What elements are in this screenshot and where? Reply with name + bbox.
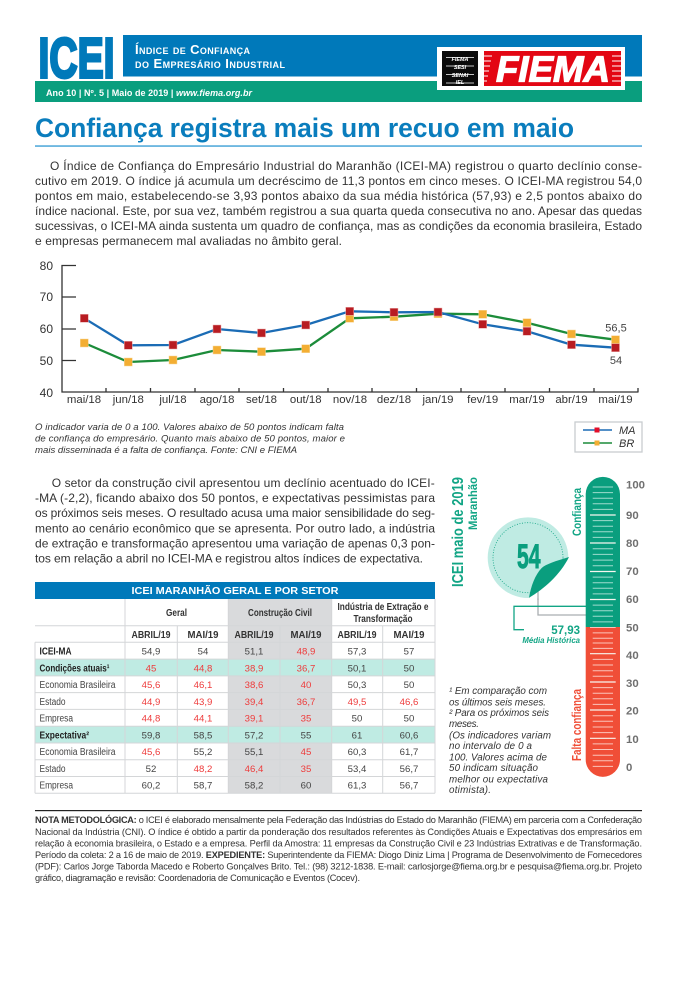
chart axes: jul/18	[158, 394, 187, 406]
row: Economia Brasileira expectativa: Economia Brasileira	[40, 747, 116, 758]
row: ICEI-MA: ICEI-MA	[40, 646, 72, 658]
FIEMA logo: IEL	[456, 80, 464, 86]
legend: MA	[619, 425, 636, 437]
thermometer scale: 60	[626, 594, 639, 606]
thermometer scale: 70	[626, 566, 639, 578]
row: Empresa: 50	[404, 714, 414, 725]
row: Empresa: 44,8	[142, 714, 160, 725]
legend	[575, 422, 642, 452]
row: Expectativa: 59,8	[142, 730, 160, 741]
footnotes: meses.	[449, 719, 479, 730]
row: Estado expectativa: 53,4	[348, 764, 367, 775]
footnotes: 50 indicam situação	[449, 763, 539, 774]
value label MA: 54	[610, 355, 622, 367]
table title bar: ICEI MARANHÃO GERAL E POR SETOR	[132, 584, 339, 597]
intro paragraph: cutivo em 2019. O índice já acumula um decréscimo de 11,3 pontos em cinco meses. O ICEI-MA registrou 54,0	[35, 174, 642, 188]
row: Economia Brasileira: 38,6	[245, 680, 263, 691]
row: Condições atuais: 38,9	[245, 663, 263, 674]
row: Economia Brasileira expectativa: 45	[301, 747, 311, 758]
intro paragraph: O Índice de Confiança do Empresário Industrial do Maranhão (ICEI-MA) registrou o quarto declínio conse-	[50, 158, 642, 173]
value label BR: 56,5	[605, 322, 627, 334]
chart axes: 80	[40, 259, 53, 273]
historical average label: 57,93	[551, 625, 580, 637]
row: Economia Brasileira: Economia Brasileira	[40, 680, 116, 691]
row: Estado expectativa: 46,4	[245, 764, 264, 775]
gauge heading: ICEI maio de 2019	[450, 477, 467, 587]
intro paragraph: pontos em maio, estabelecendo-se 3,93 pontos abaixo da sua média histórica (57,93) e 2,5 pontos abaixo do	[35, 189, 642, 203]
row: Economia Brasileira expectativa: 55,1	[245, 747, 263, 758]
row: ICEI-MA: 48,9	[297, 646, 315, 658]
table column headers: MAI/19	[188, 630, 219, 641]
chart axes: abr/19	[555, 394, 588, 406]
thermometer scale: 10	[626, 734, 639, 746]
ICEI wordmark: ICEI	[38, 26, 114, 90]
blue header bar	[123, 35, 642, 76]
table	[35, 582, 435, 793]
chart axes: dez/18	[377, 394, 411, 406]
row: Empresa: 44,1	[194, 714, 212, 725]
methodological note: Período da coleta: 2 a 16 de maio de 2019. EXPEDIENTE: Superintendente da FIEMA: Diogo Diniz Lima | Programa de Desenvolvimento de Fornecedores	[35, 850, 642, 860]
second paragraph: mento ao cenário econômico que se apresenta. Por outro lado, a indústria	[35, 522, 435, 536]
row: Economia Brasileira expectativa	[40, 747, 418, 758]
series BR	[80, 310, 620, 366]
FIEMA logo: FIEMA	[452, 57, 468, 63]
table column headers: MAI/19	[290, 630, 322, 641]
value badge 54: 54	[517, 538, 541, 576]
row: Expectativa: 60,6	[400, 730, 418, 741]
row: Economia Brasileira: 46,1	[194, 680, 212, 691]
row: Estado expectativa: 35	[301, 764, 311, 775]
footnotes: no intervalo de 0 a	[449, 741, 533, 752]
chart axes: fev/19	[467, 394, 498, 406]
table column headers: ABRIL/19	[234, 630, 274, 641]
chart axes: mai/19	[598, 394, 633, 406]
row: Estado expectativa: 52	[146, 764, 156, 775]
row: Condições atuais: 50	[404, 663, 414, 674]
table column headers: Indústria de Extração e	[338, 602, 429, 613]
chart axes: 60	[40, 322, 53, 336]
table title bar	[35, 582, 435, 599]
table column headers	[132, 602, 429, 641]
row: Expectativa	[40, 730, 418, 741]
chart caption: de confiança do empresário. Quanto mais abaixo de 50 pontos, maior e	[35, 434, 345, 444]
row: Economia Brasileira: 45,6	[142, 680, 160, 691]
gauge heading	[450, 477, 480, 587]
row: Empresa: 50	[352, 714, 362, 725]
row: Estado: 43,9	[194, 697, 212, 708]
row: Empresa expectativa: 60	[301, 781, 311, 792]
row: Estado: 49,5	[348, 697, 366, 708]
second paragraph: os próximos seis meses. O resultado acusa uma maior sensibilidade do seg-	[35, 506, 435, 520]
chart axes: 40	[40, 386, 53, 400]
second paragraph: O setor da construção civil apresentou um declínio acentuado do ICEI-	[52, 476, 435, 490]
row: Economia Brasileira expectativa: 55,2	[194, 747, 212, 758]
intro paragraph: e empresas permanecem mal avaliadas no âmbito geral.	[35, 234, 342, 248]
chart axes: mai/18	[67, 394, 101, 406]
chart axes: set/18	[246, 394, 277, 406]
chart axes: out/18	[290, 394, 322, 406]
second paragraph: tos em relação a abril no ICEI-MA e registrou altos índices de expectativa.	[35, 552, 423, 566]
table column headers: Transformação	[354, 614, 412, 625]
row: Empresa expectativa: Empresa	[40, 781, 73, 792]
methodological note: gráfico, diagramação e revisão: Coordenadoria de Comunicação e Eventos (Cocev).	[35, 873, 360, 883]
chart axes: ago/18	[200, 394, 234, 406]
thermometer scale: 0	[626, 762, 632, 774]
row: Estado expectativa: 56,7	[400, 764, 418, 775]
table column headers: ABRIL/19	[132, 630, 171, 641]
line chart	[40, 259, 638, 406]
row: Condições atuais: 44,8	[194, 663, 212, 674]
intro paragraph: sucessivas, o ICEI-MA ainda sustenta um quadro de confiança, mas as condições da economia brasileira, Estado	[35, 219, 642, 233]
row: Estado: 46,6	[400, 697, 418, 708]
methodological note: (PDF): Carlos Jorge Taborda Macedo e Roberto Gonçalves Brito. Tel.: (98) 3212-1838. E-mail: carlosjorge@fiema.org.br e pesquisa@fiema.org.br. Projeto	[35, 862, 642, 872]
historical average label: Média Histórica	[522, 636, 581, 645]
second paragraph	[35, 476, 435, 566]
chart axes: nov/18	[333, 394, 367, 406]
row: Economia Brasileira expectativa: 61,7	[400, 747, 418, 758]
methodological note: relação à economia brasileira, o Estado e a empresa. Perfil da Amostra: 11 empresas da Construção Civil e 23 Indústrias Extrativas e de Transformação.	[35, 838, 642, 848]
title: Confiança registra mais um recuo em maio	[35, 113, 574, 143]
row: Estado expectativa	[40, 764, 418, 775]
methodological note: Nacional da Indústria (CNI). O índice é obtido a partir da ponderação dos resultados referentes às Condições Atuais e Expectativas dos empresários em	[35, 827, 642, 837]
methodological note: NOTA METODOLÓGICA: o ICEI é elaborado mensalmente pela Federação das Indústrias do Estado do Maranhão (FIEMA) em parceria com a Confederação	[35, 814, 642, 825]
row: Empresa	[40, 714, 414, 725]
row: ICEI-MA: 57,3	[348, 646, 366, 658]
chart axes: jun/18	[112, 394, 144, 406]
thermometer	[586, 477, 620, 777]
row: Estado expectativa: 48,2	[194, 764, 212, 775]
chart caption	[35, 422, 345, 456]
FIEMA logo	[437, 47, 625, 90]
row: ICEI-MA: 57	[404, 646, 414, 658]
gauge heading: Maranhão	[466, 477, 480, 530]
green edition bar: Ano 10 | Nº. 5 | Maio de 2019 | www.fiema.org.br	[46, 88, 252, 98]
row: Economia Brasileira	[40, 680, 414, 691]
footnotes: 100. Valores acima de	[449, 752, 548, 764]
header	[35, 26, 642, 102]
connector lines	[514, 588, 590, 630]
row: Estado: 36,7	[297, 697, 315, 708]
row: Empresa: 39,1	[245, 714, 263, 725]
intro paragraph: índice nacional. Este, por sua vez, também registrou a sua quarta queda consecutiva no ano. Apesar das quedas	[35, 204, 642, 218]
table column headers: ABRIL/19	[338, 630, 377, 641]
row: Empresa expectativa: 56,7	[400, 781, 418, 792]
value badge 54	[488, 517, 572, 600]
row: Condições atuais: 36,7	[297, 663, 315, 674]
row: Empresa expectativa: 60,2	[142, 781, 160, 792]
second paragraph: de extração e transformação apresentou uma variação de apenas 0,3 pon-	[35, 536, 435, 550]
thermometer scale	[626, 480, 645, 774]
row: ICEI-MA: 54,9	[142, 646, 160, 658]
row: Estado: 44,9	[142, 697, 160, 708]
row: Economia Brasileira expectativa: 45,6	[142, 747, 160, 758]
footnotes: melhor ou expectativa	[449, 774, 549, 786]
row: Empresa expectativa: 61,3	[348, 781, 366, 792]
second paragraph: -MA (-2,2), ficando abaixo dos 50 pontos, e expectativas pessimistas para	[35, 491, 435, 505]
row: Condições atuais: 45	[146, 663, 156, 674]
label Falta confiança: Falta confiança	[570, 688, 584, 761]
blue header bar: do Empresário Industrial	[135, 56, 286, 71]
row: ICEI-MA: 51,1	[245, 646, 263, 658]
table column headers: Construção Civil	[248, 608, 312, 619]
thermometer scale: 100	[626, 480, 645, 492]
chart axes: mar/19	[509, 394, 545, 406]
row: Expectativa: 55	[301, 730, 311, 741]
footnotes: os últimos seis meses.	[449, 698, 546, 708]
row: Estado: Estado	[40, 697, 66, 708]
green edition bar	[35, 81, 642, 102]
chart caption: O indicador varia de 0 a 100. Valores abaixo de 50 pontos indicam falta	[35, 422, 344, 433]
row: Condições atuais	[40, 663, 414, 674]
row: Estado: 39,4	[245, 697, 264, 708]
row: ICEI-MA	[40, 646, 414, 658]
row: Empresa expectativa	[40, 781, 418, 792]
footnotes: otimista).	[449, 785, 491, 796]
thermometer scale: 20	[626, 706, 639, 718]
row: Condições atuais: 50,1	[348, 663, 366, 674]
row: Estado	[40, 697, 418, 708]
methodological note	[35, 810, 642, 883]
FIEMA logo: FIEMA	[496, 48, 610, 90]
row: Economia Brasileira expectativa: 60,3	[348, 747, 366, 758]
thermometer scale: 80	[626, 538, 639, 550]
footnotes: ² Para os próximos seis	[449, 708, 549, 719]
gauge panel	[450, 477, 645, 777]
chart caption: mais disseminada é a falta de confiança. Fonte: CNI e FIEMA	[35, 445, 297, 456]
chart axes: jan/19	[421, 394, 454, 406]
chart axes	[40, 259, 638, 406]
thermometer scale: 30	[626, 678, 639, 690]
row: Empresa expectativa: 58,7	[194, 781, 212, 792]
row: Expectativa: Expectativa²	[40, 730, 90, 741]
footnotes: ¹ Em comparação com	[449, 686, 547, 697]
FIEMA logo: SENAI	[452, 73, 469, 79]
chart axes: 70	[40, 290, 53, 304]
row: Expectativa: 57,2	[245, 730, 263, 741]
row: Estado expectativa: Estado	[40, 764, 66, 775]
footnotes: (Os indicadores variam	[449, 730, 551, 742]
chart axes: 50	[40, 354, 53, 368]
row: Empresa: Empresa	[40, 714, 73, 725]
footnotes	[449, 686, 551, 796]
table backgrounds	[35, 599, 435, 793]
row: Economia Brasileira: 50	[404, 680, 414, 691]
legend: BR	[619, 438, 634, 450]
row: Expectativa: 58,5	[194, 730, 212, 741]
row: ICEI-MA: 54	[198, 646, 209, 658]
blue header bar: Índice de Confiança	[135, 42, 250, 57]
thermometer scale: 50	[626, 622, 639, 634]
row: Expectativa: 61	[352, 730, 362, 741]
label Confiança: Confiança	[570, 488, 584, 536]
row: Economia Brasileira: 40	[301, 680, 311, 691]
thermometer scale: 40	[626, 650, 639, 662]
FIEMA logo: SESI	[454, 65, 467, 71]
row: Empresa: 35	[301, 714, 311, 725]
historical average label	[522, 625, 581, 645]
row: Condições atuais: Condições atuais¹	[40, 663, 110, 674]
row: Economia Brasileira: 50,3	[348, 680, 366, 691]
row: Empresa expectativa: 58,2	[245, 781, 263, 792]
table column headers: MAI/19	[394, 630, 425, 641]
intro paragraph	[35, 158, 642, 248]
thermometer scale: 90	[626, 510, 639, 522]
series MA	[80, 307, 620, 352]
table column headers: Geral	[166, 608, 187, 619]
